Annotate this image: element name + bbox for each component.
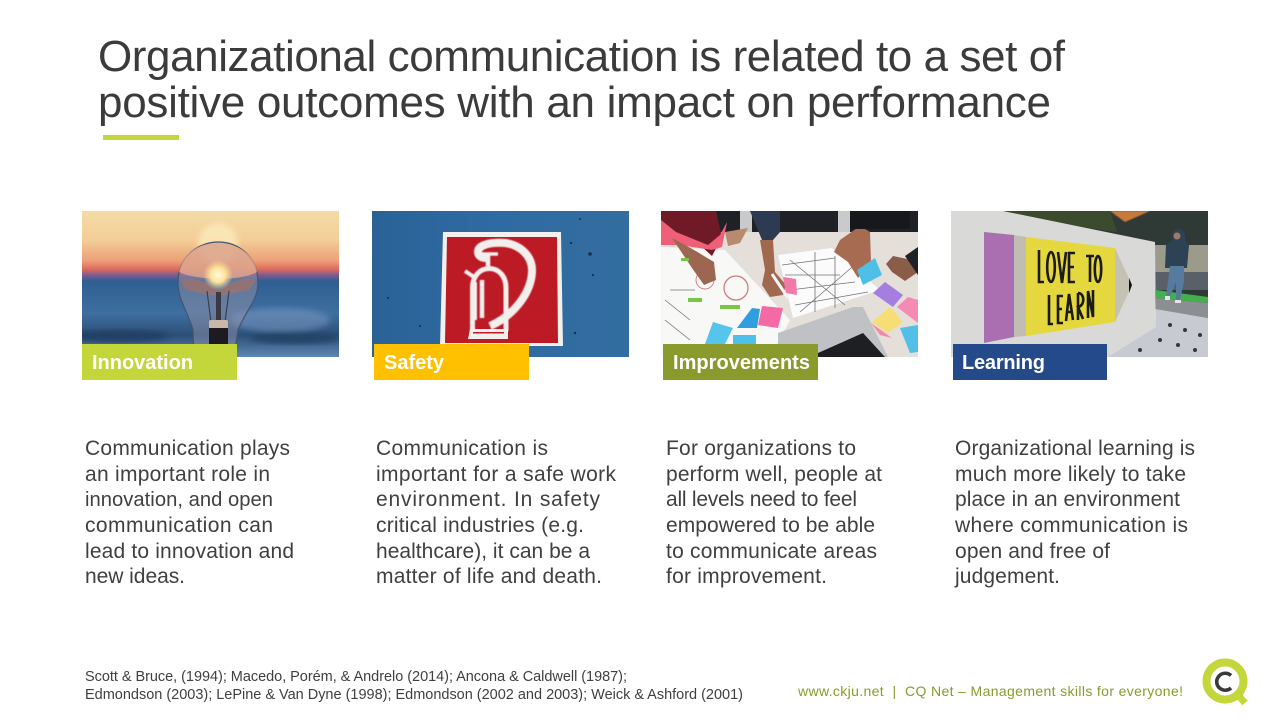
- text: innovation description: Communication plays: [85, 437, 290, 460]
- label: Safety: Safety: [384, 352, 445, 374]
- title: Organizational communication is related to a set of: [98, 32, 1066, 81]
- title: [98, 32, 1066, 127]
- text: improvements description: empowered to be able: [666, 514, 875, 537]
- text: improvements description: for improvement.: [666, 565, 827, 588]
- panel: learning: [951, 211, 1208, 588]
- text: safety description: environment. In safety: [376, 488, 600, 511]
- title accent underline: [103, 135, 179, 140]
- panel: innovation: [70, 211, 340, 588]
- text: innovation description: lead to innovation and: [85, 540, 294, 563]
- icon: CQ logo: [1206, 662, 1245, 703]
- references: Edmondson (2003); LePine & Van Dyne (1998); Edmondson (2002 and 2003); Weick & Ashford (2001): [85, 687, 743, 703]
- text: safety description: critical industries (e.g.: [376, 514, 584, 537]
- photo: love to learn pencil sign: [951, 211, 1208, 357]
- text: safety description: healthcare), it can be a: [376, 540, 590, 563]
- panel: safety: [372, 211, 629, 588]
- text: safety description: important for a safe work: [376, 463, 616, 486]
- text: improvements description: For organizations to: [666, 437, 856, 460]
- text: learning description: where communication is: [954, 514, 1188, 537]
- text: innovation description: [85, 437, 294, 588]
- photo: team sketching on paper with sticky notes: [661, 211, 918, 357]
- photo: light bulb at sunset: [70, 211, 340, 357]
- text: improvements description: to communicate areas: [666, 540, 877, 563]
- label: Improvements: Improvements: [673, 352, 810, 374]
- text: innovation description: communication can: [85, 514, 273, 537]
- label: Improvements: [663, 344, 818, 380]
- label: Learning: Learning: [962, 352, 1045, 374]
- text: safety description: Communication is: [376, 437, 548, 460]
- label: Learning: [953, 344, 1107, 380]
- text: improvements description: perform well, people at: [666, 463, 882, 486]
- label: Innovation: Innovation: [92, 352, 193, 374]
- text: safety description: [376, 437, 616, 588]
- text: improvements description: [666, 437, 882, 588]
- text: innovation description: innovation, and open: [85, 489, 273, 511]
- panel: improvements: [661, 211, 918, 588]
- photo: fire extinguisher sign: [372, 211, 629, 357]
- text: learning description: [954, 437, 1195, 588]
- text: safety description: matter of life and death.: [376, 565, 602, 588]
- label: Safety: [374, 344, 529, 380]
- references: Scott & Bruce, (1994); Macedo, Porém, & Andrelo (2014); Ancona & Caldwell (1987);: [85, 669, 627, 685]
- text: learning description: open and free of: [955, 540, 1110, 563]
- text: innovation description: an important role in: [85, 463, 270, 486]
- footer link text: www.ckju.net | CQ Net – Management skills for everyone!: [797, 683, 1183, 699]
- text: improvements description: all levels need to feel: [666, 488, 857, 511]
- references: [85, 669, 743, 703]
- text: learning description: Organizational learning is: [955, 437, 1195, 460]
- text: learning description: much more likely to take: [955, 463, 1186, 486]
- text: innovation description: new ideas.: [85, 565, 185, 588]
- title: positive outcomes with an impact on performance: [98, 78, 1051, 127]
- label: Innovation: [82, 344, 237, 380]
- text: learning description: judgement.: [954, 565, 1060, 588]
- text: learning description: place in an environment: [955, 488, 1180, 511]
